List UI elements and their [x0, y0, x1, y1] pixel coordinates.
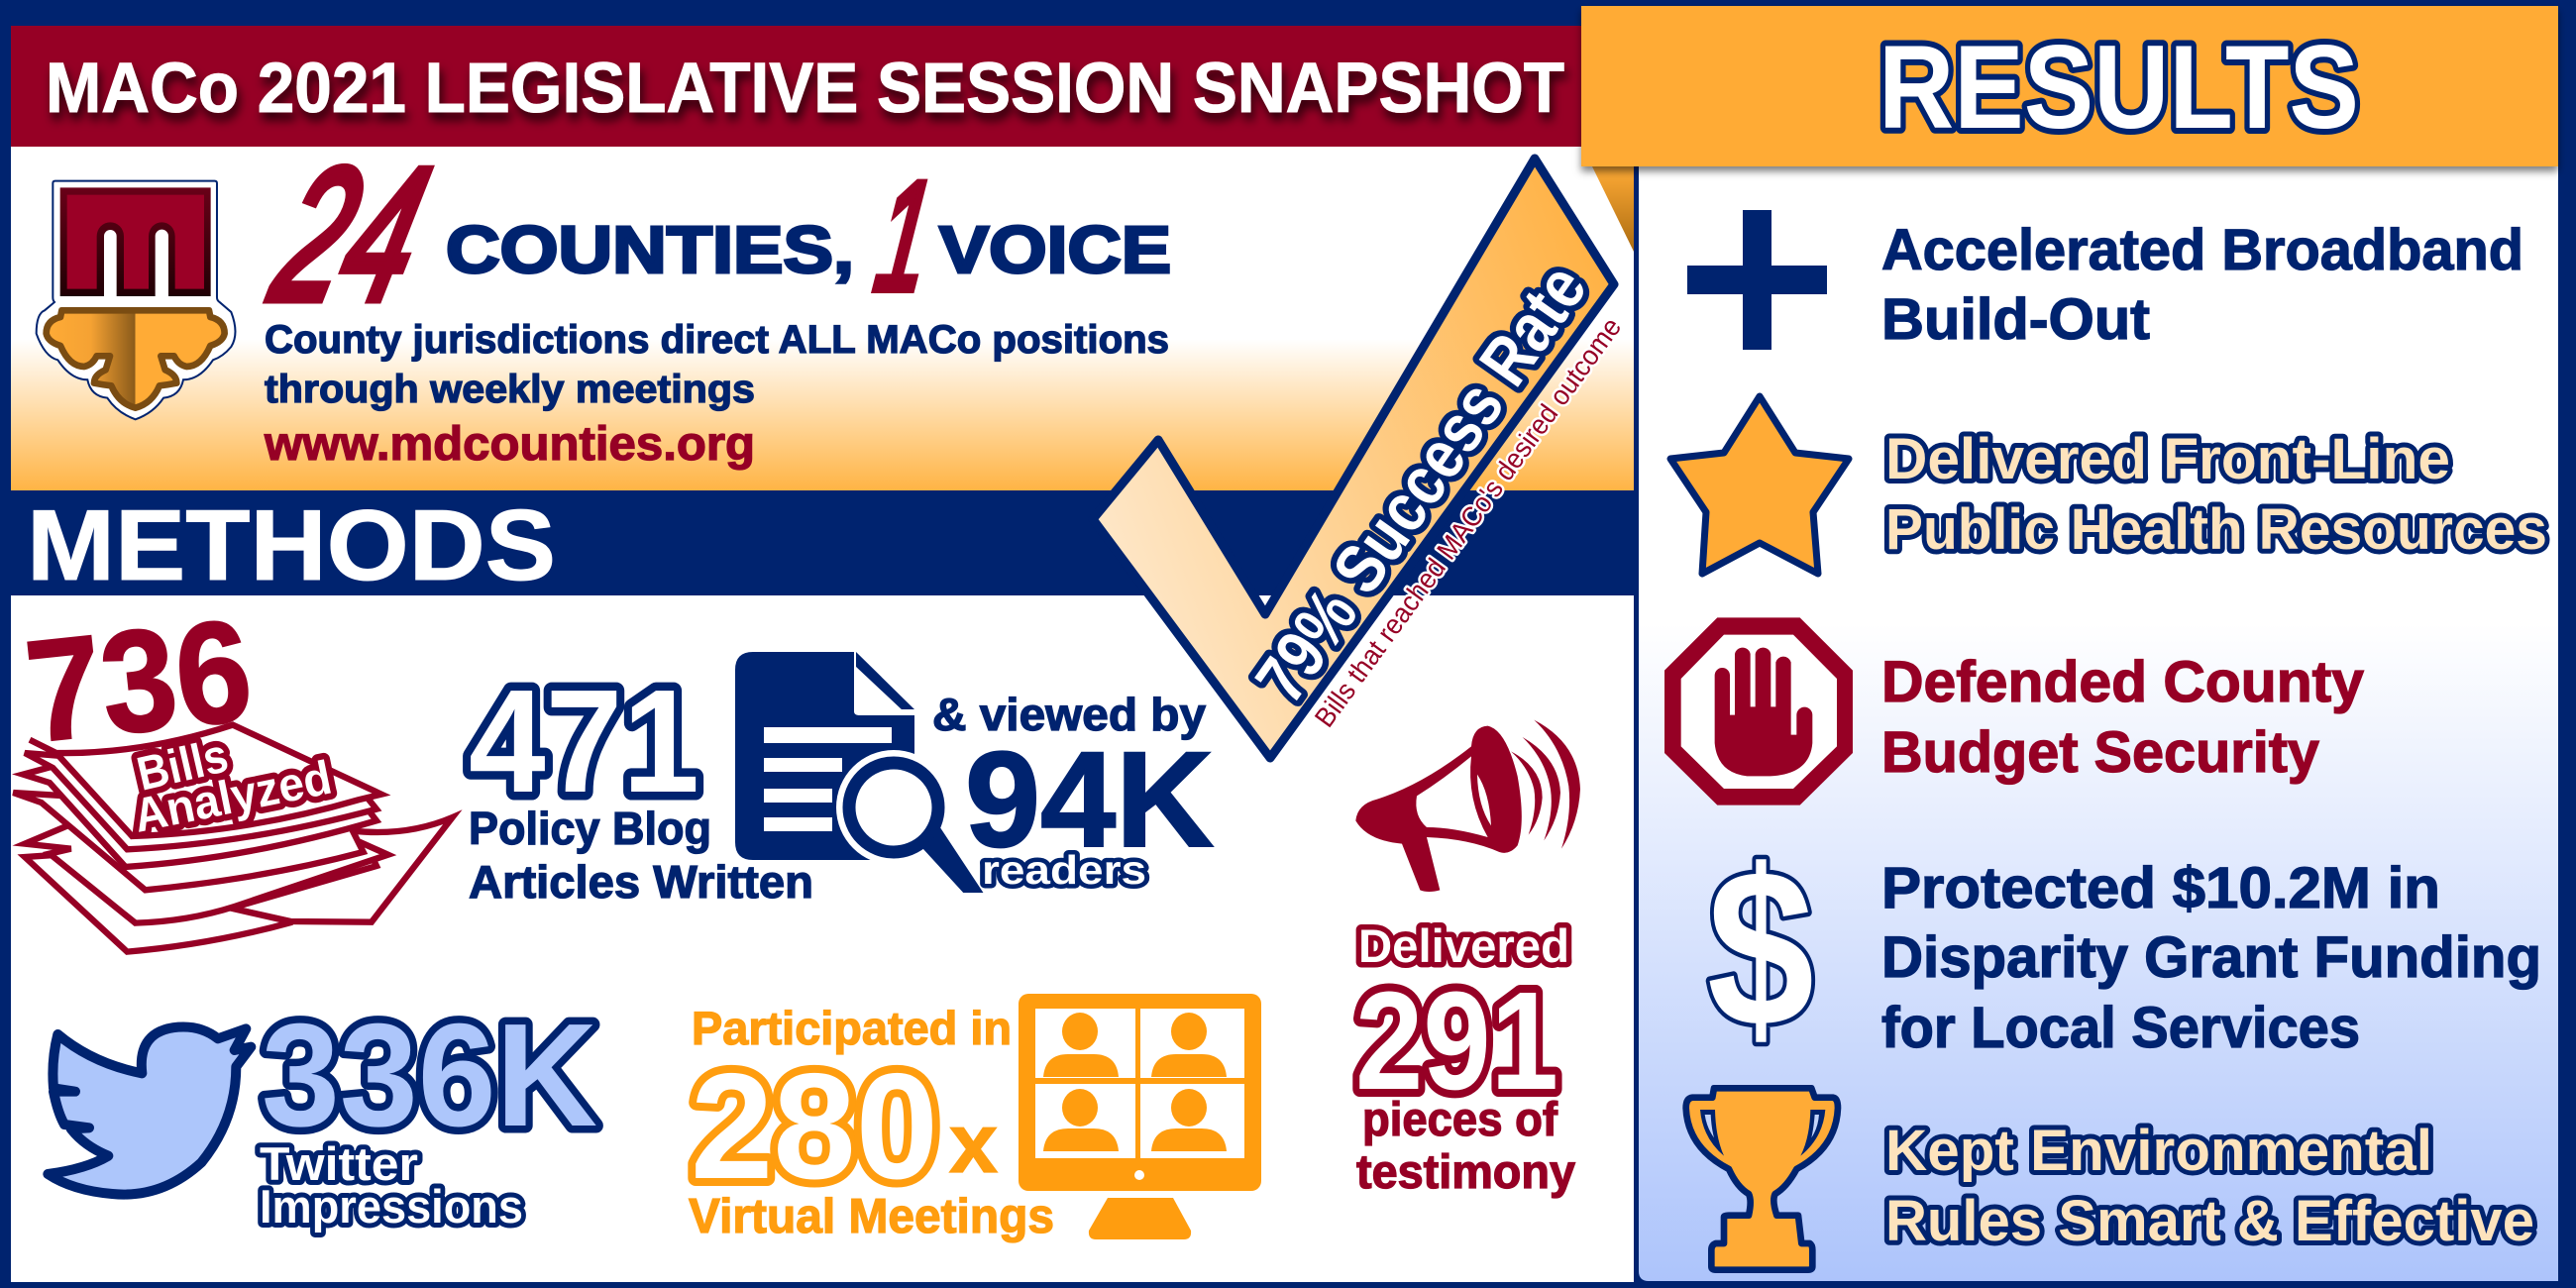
stat: 471 policy blog articles: Policy Blog — [469, 803, 711, 854]
tagline description — [265, 318, 1169, 411]
result: broadband: Accelerated Broadband — [1881, 218, 2523, 282]
stat: 280 virtual meetings: Participated in — [692, 1002, 1012, 1054]
stat: 291 pieces of testimony: pieces of — [1362, 1094, 1558, 1146]
stat: 336K twitter impressions: 336K — [262, 994, 597, 1157]
website: www.mdcounties.org — [264, 418, 755, 471]
result: county budget: Defended County — [1881, 650, 2364, 714]
icon: MACo logo — [37, 181, 235, 419]
stat: 291 pieces of testimony: 291 — [1355, 962, 1558, 1119]
stat: 291 pieces of testimony: testimony — [1356, 1146, 1575, 1199]
title: MACo 2021 LEGISLATIVE SESSION SNAPSHOT — [46, 50, 1564, 128]
success rate caption: Bills that reached MACo's desired outcome — [1309, 312, 1627, 733]
stat: 291 pieces of testimony: Delivered — [1358, 919, 1569, 972]
stat: 736 bills analyzed: Analyzed — [130, 752, 336, 843]
icon: plus — [1687, 210, 1827, 350]
result: broadband: Build-Out — [1881, 287, 2150, 352]
stat: viewed by 94K readers: 94K — [965, 724, 1214, 876]
result: county budget: Budget Security — [1881, 720, 2319, 785]
result: environmental rules — [1686, 1088, 2534, 1270]
panel divider — [1634, 166, 1639, 1284]
methods heading: METHODS — [27, 490, 556, 601]
icon: video call monitor — [1019, 994, 1261, 1239]
stat: 336K twitter impressions: Impressions — [260, 1180, 523, 1233]
tagline description: through weekly meetings — [265, 368, 755, 411]
panel: methods background — [11, 595, 1636, 1282]
stat: 336K twitter impressions — [260, 994, 597, 1233]
result: disparity grant: Disparity Grant Funding — [1881, 925, 2541, 990]
success rate label: 79% Success Rate — [1241, 251, 1601, 716]
header bar — [11, 26, 1586, 147]
tagline: 24 counties, 1 voice: COUNTIES, — [446, 213, 854, 287]
result: environmental rules: Kept Environmental — [1885, 1119, 2432, 1183]
stat: 280 virtual meetings — [689, 1002, 1054, 1243]
tagline: 24 counties, 1 voice — [256, 129, 1171, 339]
result: disparity grant: Protected $10.2M in — [1881, 856, 2440, 920]
icon: stop hand — [1664, 617, 1853, 805]
result: broadband — [1687, 210, 2523, 352]
icon: success check mark — [1093, 159, 1614, 758]
stat: 291 pieces of testimony — [1355, 919, 1575, 1199]
icon: document with magnifier — [735, 652, 976, 892]
icon: dollar sign: $ — [1707, 822, 1814, 1073]
stat: 471 policy blog articles — [469, 660, 813, 908]
icon: trophy — [1686, 1088, 1838, 1270]
stat: 280 virtual meetings: x — [949, 1097, 998, 1190]
stat: viewed by 94K readers: & viewed by — [932, 689, 1206, 740]
result: disparity grant: for Local Services — [1881, 996, 2360, 1060]
stat: 736 bills analyzed: 736 — [19, 589, 259, 773]
results banner — [1581, 6, 2558, 166]
icon: paper stack — [13, 725, 453, 952]
panel: tagline gradient — [11, 147, 1636, 490]
stat: 736 bills analyzed — [13, 589, 453, 952]
icon: twitter bird — [48, 1026, 251, 1195]
tagline: 24 counties, 1 voice: 24 — [256, 129, 446, 339]
panel: results background — [1639, 166, 2558, 1281]
result: disparity grant — [1707, 822, 2541, 1073]
result: county budget — [1664, 617, 2364, 805]
result: public health: Delivered Front-Line — [1885, 427, 2450, 491]
tagline: 24 counties, 1 voice: 1 — [867, 151, 941, 323]
stat: 280 virtual meetings: Virtual Meetings — [689, 1190, 1054, 1243]
stat: 471 policy blog articles: Articles Written — [469, 856, 813, 908]
ribbon fold — [1592, 166, 1635, 254]
stat: 736 bills analyzed: Bills — [133, 729, 233, 802]
result: environmental rules: Rules Smart & Effective — [1885, 1189, 2534, 1253]
stat: 280 virtual meetings: 280 — [691, 1042, 938, 1211]
icon: megaphone — [1355, 720, 1580, 892]
tagline description: County jurisdictions direct ALL MACo positions — [265, 318, 1169, 362]
stat: viewed by 94K readers: readers — [982, 847, 1146, 893]
stat: viewed by 94K readers — [932, 689, 1214, 893]
result: public health: Public Health Resources — [1885, 497, 2547, 562]
tagline: 24 counties, 1 voice: VOICE — [939, 213, 1171, 287]
stat: 336K twitter impressions: Twitter — [260, 1137, 418, 1190]
results heading: RESULTS — [1878, 21, 2359, 154]
result: public health — [1670, 396, 2547, 574]
methods band — [11, 490, 1636, 595]
stat: 471 policy blog articles: 471 — [469, 660, 699, 823]
icon: star — [1670, 396, 1849, 574]
